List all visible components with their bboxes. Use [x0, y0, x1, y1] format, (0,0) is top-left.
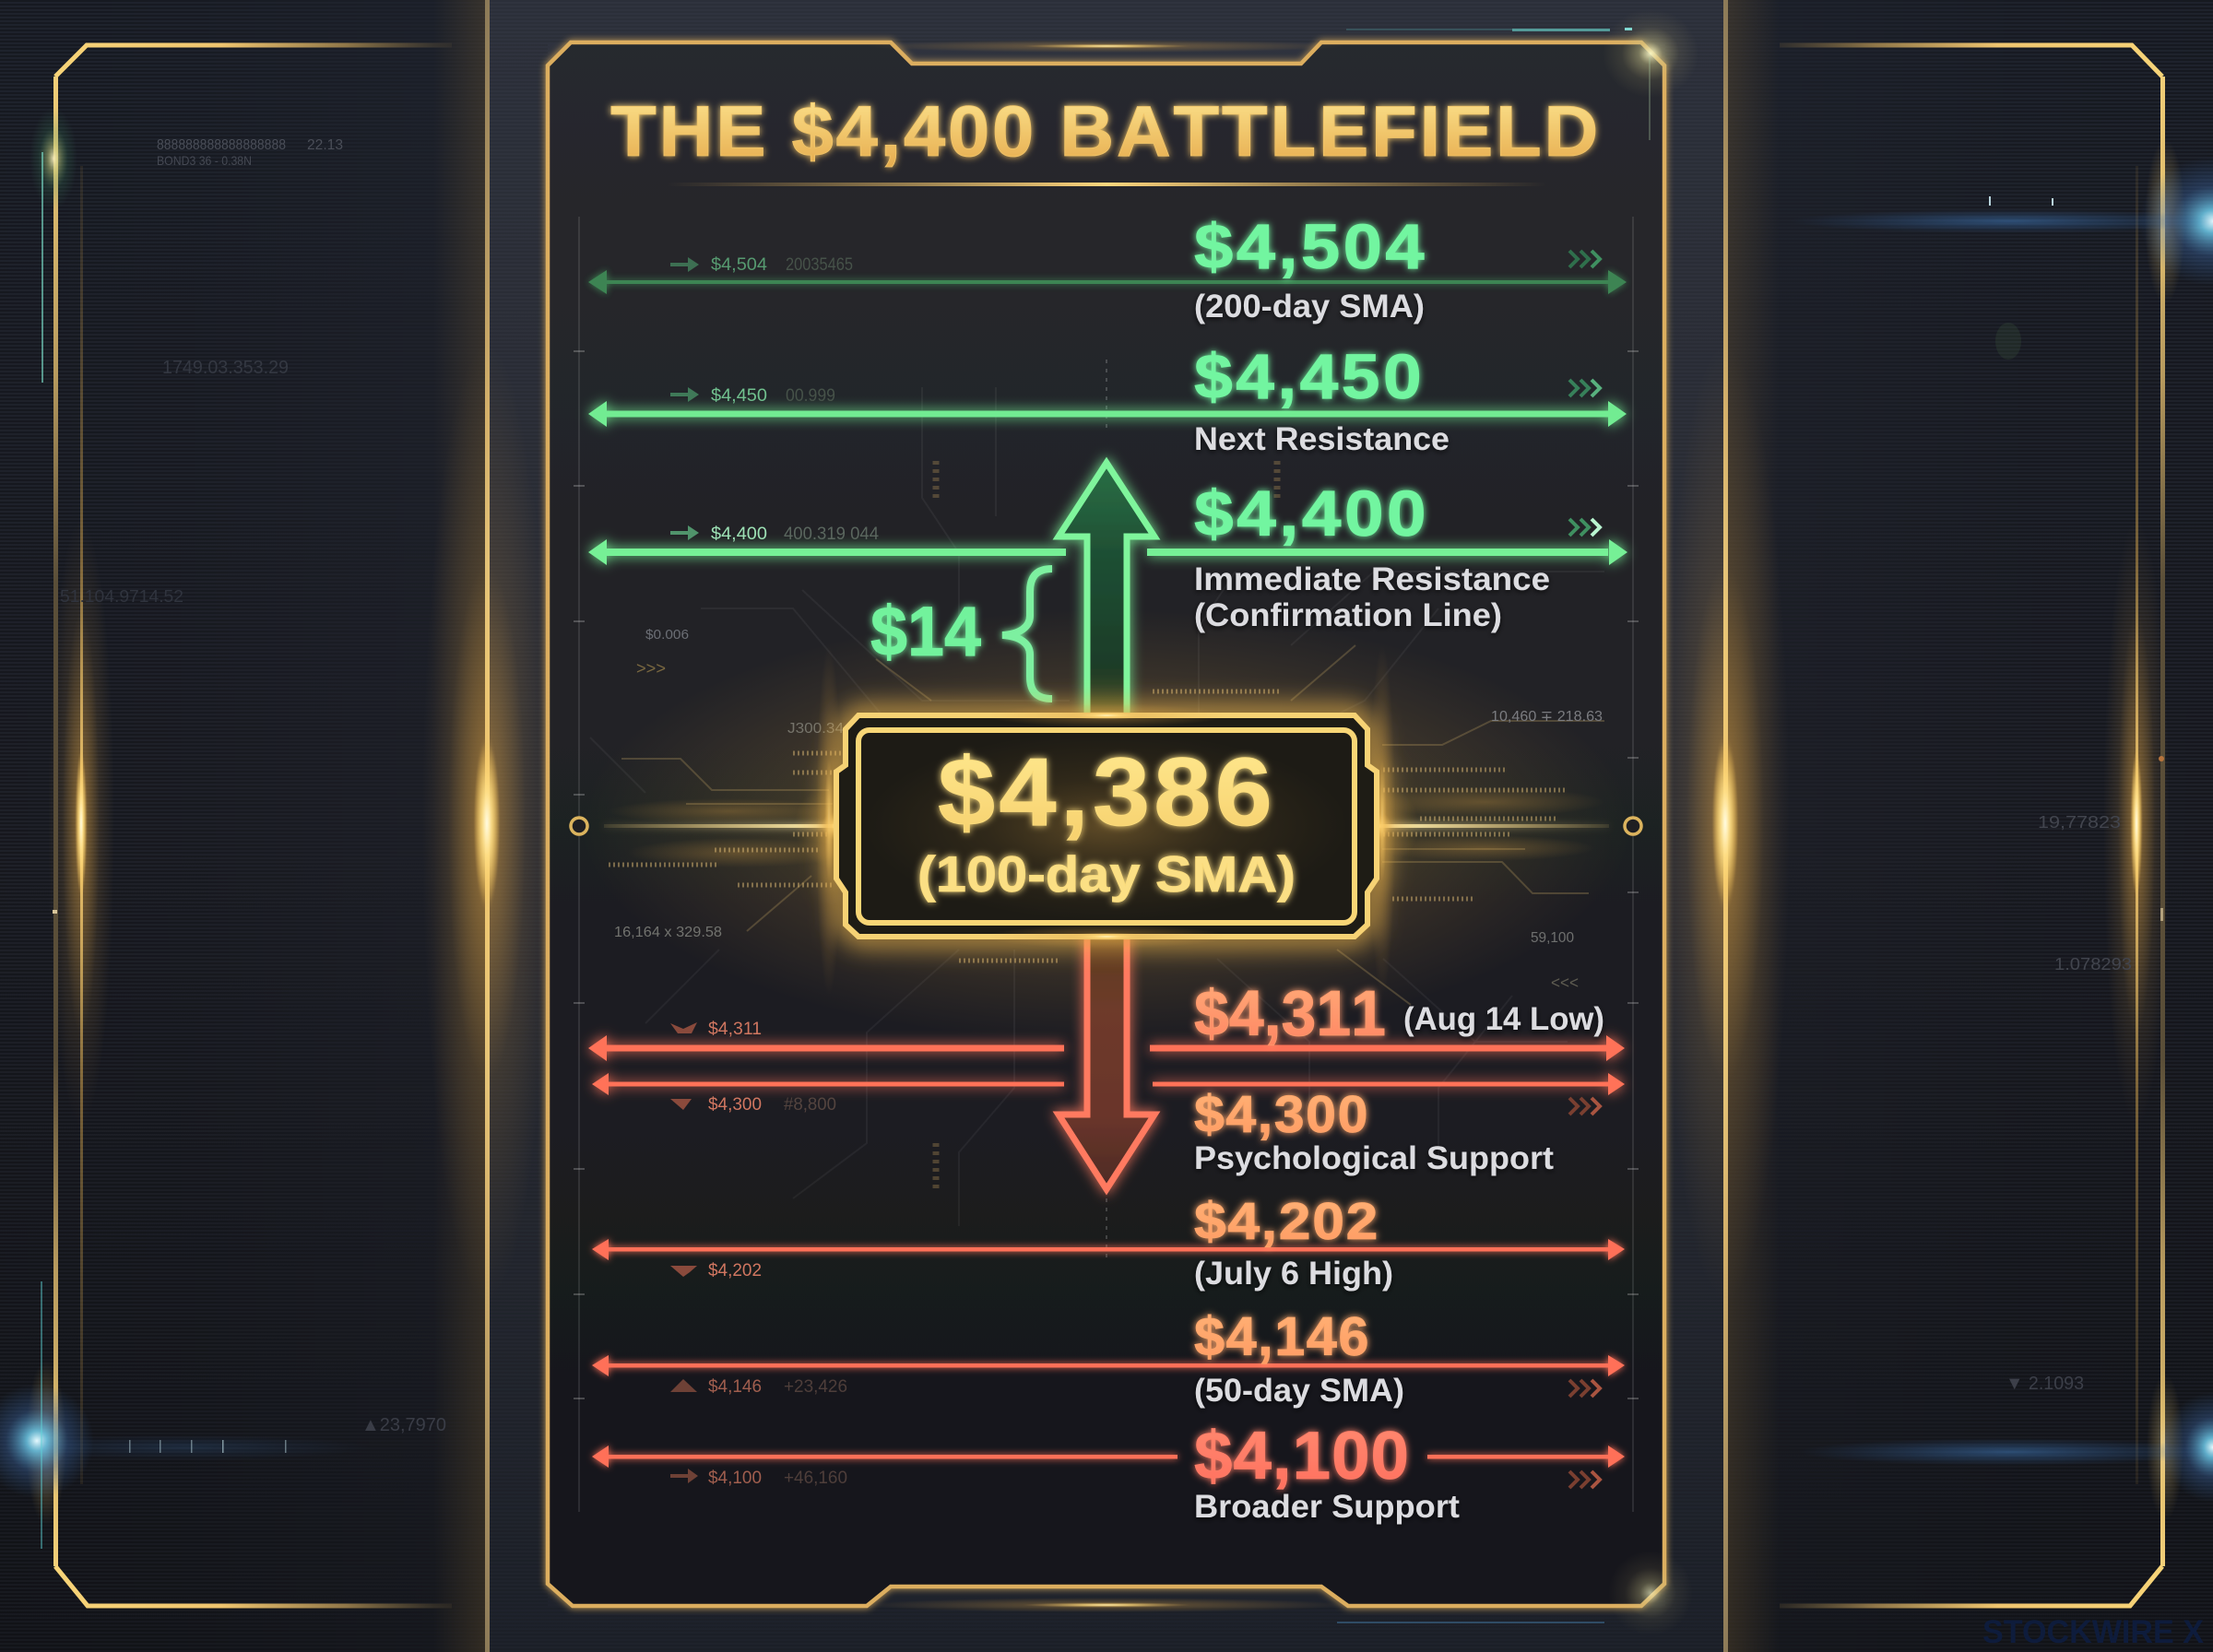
bracket [1002, 569, 1052, 699]
value: $4,311: $4,311 [1194, 977, 1386, 1049]
vertical light flares [794, 645, 1419, 996]
side panel faint data readouts: BOND3 36 - 0.38N [157, 153, 252, 168]
chevrons: red [1569, 1098, 1600, 1488]
value: $4,300: $4,300 [1194, 1085, 1369, 1144]
small tags: red [670, 1020, 847, 1488]
down arrow [1059, 926, 1154, 1189]
labels: green levels: (Confirmation Line) [1194, 597, 1502, 633]
value: $4,504: $4,504 [1194, 211, 1427, 282]
labels: red levels: (July 6 High) [1194, 1256, 1393, 1292]
value: $4,400: $4,400 [1194, 478, 1429, 549]
value: $4,386: $4,386 [938, 738, 1276, 846]
horizontal light beams and end nodes [571, 818, 1641, 834]
card outline [548, 42, 1664, 1606]
horizontal gold streaks beside the box [609, 787, 1604, 867]
value: $4,146: $4,146 [1194, 1306, 1370, 1367]
small tags: green: $4,504 [711, 255, 767, 275]
small tags: green: 400.319 044 [784, 525, 879, 544]
small tags: red: $4,100 [708, 1469, 762, 1488]
faint chart annotations: 16,164 x 329.58 [614, 925, 722, 940]
side panel faint data readouts: 51.104.9714.52 [60, 587, 183, 606]
small tags: green: 00.999 [786, 386, 835, 406]
title: THE $4,400 BATTLEFIELD [610, 90, 1601, 171]
line: $4,504 [588, 270, 1627, 294]
labels: red levels: Broader Support [1194, 1489, 1460, 1525]
small tags: red: $4,311 [708, 1020, 762, 1039]
small tags: red: +46,160 [784, 1469, 847, 1488]
central box gold haze [581, 609, 1632, 1043]
faint chart annotations: 10,460 ∓ 218.63 [1491, 709, 1603, 725]
bottom flare [987, 925, 1226, 949]
small tags: red: #8,800 [784, 1095, 836, 1115]
small tags: red: $4,146 [708, 1377, 762, 1397]
line: $4,311 [588, 1035, 1625, 1061]
top flare [987, 703, 1226, 727]
faint chart annotations: 59,100 [1531, 930, 1574, 946]
line: $4,146 [592, 1355, 1625, 1376]
faint chart annotations: <<< [1551, 974, 1579, 992]
left outer frame [53, 45, 452, 1606]
side panel faint data readouts: ▼ 2.1093 [2006, 1374, 2084, 1394]
labels: green levels: Next Resistance [1194, 421, 1450, 457]
line: $4,300 [592, 1073, 1625, 1095]
line: $4,450 [588, 401, 1627, 427]
corner flare top right [1346, 9, 1698, 140]
top notch flare [867, 40, 1346, 53]
title underline [667, 183, 1547, 186]
central strip border lines [485, 0, 1728, 1652]
value: $4,450: $4,450 [1194, 341, 1425, 412]
small tags: green: 20035465 [786, 255, 853, 275]
side panel faint data readouts: 888888888888888888 [157, 137, 286, 153]
side panel faint data readouts: 19,77823 [2038, 813, 2121, 832]
background: central lighter strip [488, 0, 1725, 1652]
line: $4,202 [592, 1239, 1625, 1260]
inner glow [865, 732, 1348, 920]
corner flare bottom right [1337, 1551, 1693, 1635]
small tick marks in side panels [53, 196, 2164, 1453]
faint chart annotations: $0.006 [645, 627, 689, 643]
outer bezel [836, 715, 1377, 937]
bottom notch flare [867, 1598, 1346, 1612]
resistance levels (green) [588, 211, 1627, 724]
data dot rows around the box [609, 691, 1568, 961]
small tags: green [670, 255, 879, 544]
side panel faint data readouts: ▲23,7970 [361, 1415, 446, 1435]
labels: green levels [1194, 289, 1550, 633]
box glow [836, 715, 1377, 937]
small tags: green: $4,400 [711, 525, 767, 544]
line: $4,100 [592, 1446, 1625, 1468]
labels: green levels: Immediate Resistance [1194, 561, 1550, 597]
label: 100-day SMA: (100-day SMA) [917, 845, 1296, 903]
side panel faint data readouts: 1.078293 [2054, 955, 2132, 974]
right outer frame [1780, 45, 2165, 1606]
small tags: red: $4,202 [708, 1261, 762, 1280]
value: $4,100: $4,100 [1194, 1419, 1410, 1493]
central value box [571, 645, 1641, 996]
labels: red levels: (50-day SMA) [1194, 1373, 1404, 1409]
watermark: STOCKWIRE: STOCKWIRE X [1982, 1614, 2205, 1650]
labels: red levels: (Aug 14 Low) [1403, 1001, 1604, 1037]
labels: red levels: Psychological Support [1194, 1140, 1554, 1176]
support levels (red) [588, 926, 1625, 1525]
small tags: green: $4,450 [711, 386, 767, 406]
small tags: red: $4,300 [708, 1095, 762, 1115]
panel: main card [548, 9, 1698, 1635]
callout: $14: $14 [870, 593, 981, 671]
labels: red levels [1194, 1001, 1604, 1525]
line: $4,400 [588, 539, 1627, 565]
up arrow [1059, 463, 1154, 724]
faint chart annotations: J300.34 [787, 721, 844, 737]
faint chart annotations: >>> [636, 659, 666, 678]
faint chart annotations [614, 627, 1603, 992]
labels: green levels: (200-day SMA) [1194, 289, 1425, 324]
small tags: red: +23,426 [784, 1377, 847, 1397]
chevrons: green [1569, 251, 1600, 536]
side panel faint data readouts [60, 137, 2132, 1435]
value: $4,202: $4,202 [1194, 1192, 1379, 1251]
inner frame [858, 730, 1355, 923]
side panel faint data readouts: 22.13 [307, 137, 343, 153]
central faint grid and circuit traces [574, 217, 1639, 1512]
side panel faint data readouts: 1749.03.353.29 [162, 358, 289, 378]
